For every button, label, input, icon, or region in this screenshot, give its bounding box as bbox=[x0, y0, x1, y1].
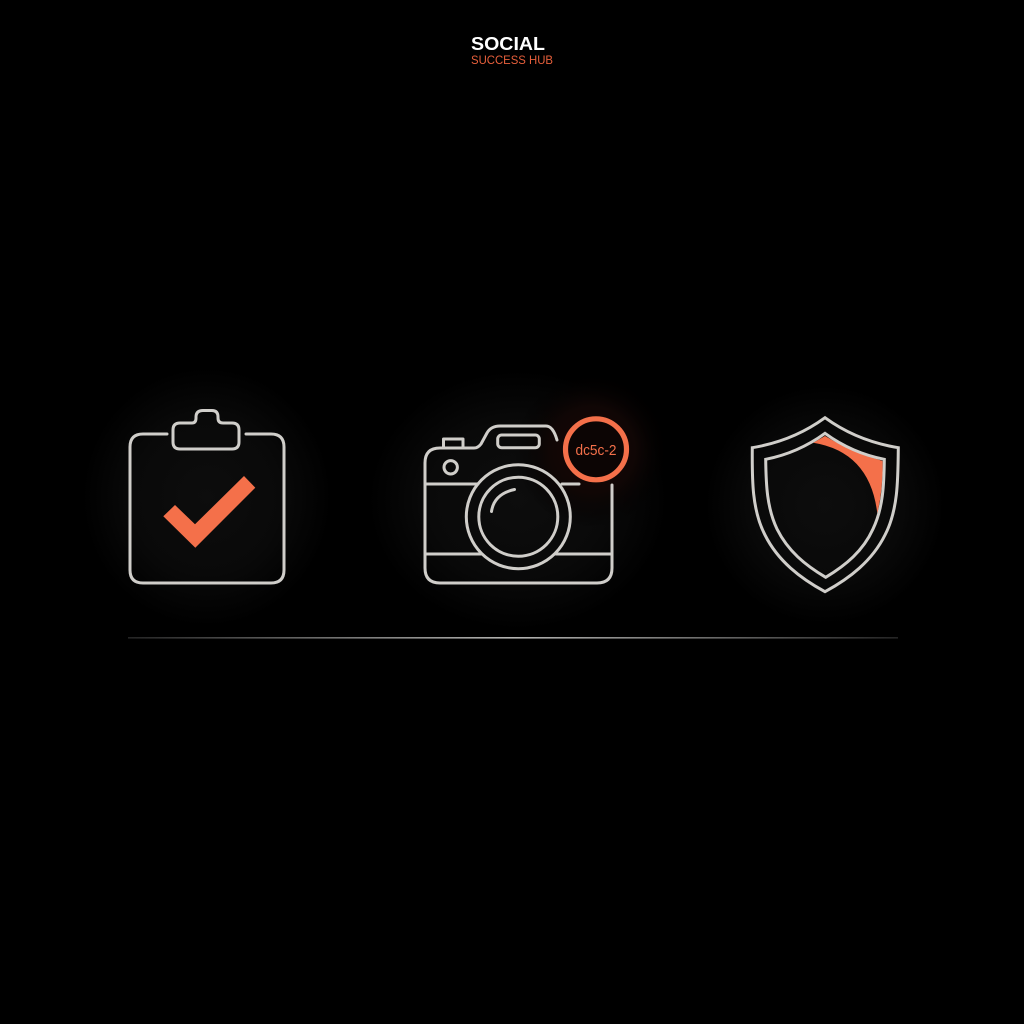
title: SUCCESS HUB bbox=[471, 53, 553, 67]
badge: dc5c-2 bbox=[576, 442, 616, 459]
check mark bbox=[163, 476, 255, 548]
icon: camera bbox=[425, 419, 626, 583]
shield orange corner bbox=[813, 436, 883, 513]
icon: shield bbox=[752, 418, 898, 592]
title: SOCIAL bbox=[471, 33, 545, 54]
divider line bbox=[128, 637, 898, 639]
icon: clipboard with checkmark bbox=[130, 410, 284, 583]
title bbox=[471, 33, 553, 67]
badge bbox=[566, 419, 626, 480]
